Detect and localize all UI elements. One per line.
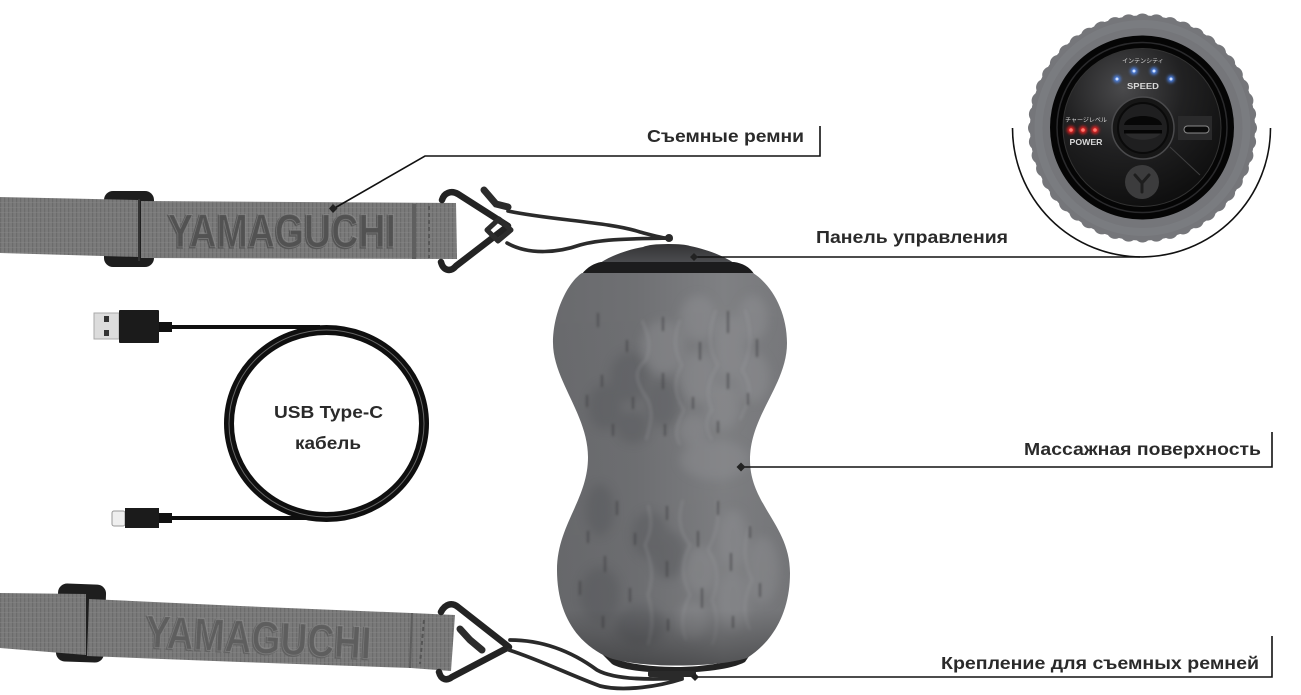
triangular ring lower [439, 604, 509, 679]
speed labels: SPEED [1127, 81, 1159, 91]
strap band upper right [141, 201, 457, 259]
pinch marks dark [580, 312, 760, 630]
callout: control panel label: Панель управления [816, 227, 1008, 247]
elastic cords lower [509, 640, 682, 688]
ball surface [553, 273, 790, 666]
massage ball [550, 244, 795, 677]
power labels [1065, 117, 1107, 147]
upper strap [0, 190, 673, 270]
black bezel [1050, 36, 1234, 220]
type-c plug body [125, 508, 159, 528]
bead edges [636, 362, 680, 635]
dark cells [580, 352, 686, 645]
strap band lower right [87, 599, 455, 671]
callout: removable straps label [329, 126, 820, 213]
cable coil [172, 327, 424, 518]
bottom hub [648, 671, 696, 677]
control face [1063, 48, 1221, 206]
mode switch [1112, 97, 1174, 159]
callout: massage surface label: Массажная поверхность [1024, 439, 1261, 459]
strap logo lower: YAMAGUCHI [143, 606, 372, 670]
power leds [1067, 126, 1099, 134]
buckle loop upper [104, 191, 154, 267]
top black band [582, 262, 754, 274]
power labels: POWER [1070, 137, 1102, 147]
speed leds [1114, 68, 1174, 82]
bottom cap [600, 652, 752, 673]
usb a plug body [119, 310, 159, 343]
grey scalloped rim [1030, 16, 1255, 240]
light cells [641, 295, 779, 640]
callout: control panel label [690, 227, 1140, 261]
speed labels: インテンシティ [1122, 58, 1164, 65]
cable label: USB Type-C [274, 402, 383, 422]
strap logo upper: YAMAGUCHI [167, 205, 395, 258]
strap band lower left [0, 593, 86, 655]
support arc [1012, 128, 1270, 257]
buckle loop lower [56, 583, 106, 663]
callout: massage surface label [736, 432, 1272, 472]
toggle lower [460, 629, 482, 650]
cord knot upper [484, 190, 508, 207]
callout: strap mount label: Крепление для съемных ремней [941, 653, 1259, 673]
triangular ring upper [441, 192, 508, 270]
bottom shade [568, 616, 782, 666]
strap band upper left [0, 197, 138, 257]
lower strap [0, 583, 682, 688]
elastic cords upper [507, 211, 671, 252]
control panel close-up [1012, 16, 1270, 257]
usb a plug metal [94, 313, 119, 339]
strap logo upper: YAMAGUCHI [168, 204, 396, 257]
y logo button [1125, 165, 1159, 199]
top dome [600, 244, 734, 263]
usb type-c cable [94, 310, 424, 528]
ball surface relief [568, 300, 782, 666]
diagonal seam [1170, 147, 1200, 175]
speed labels [1122, 58, 1164, 91]
callout: strap mount label [691, 636, 1272, 681]
strap logo lower: YAMAGUCHI [145, 605, 373, 669]
power labels: チャージレベル [1065, 117, 1107, 124]
usb-c port [1178, 116, 1212, 140]
usb type-c cable: кабель [295, 433, 361, 453]
callout: removable straps label: Съемные ремни [647, 126, 804, 146]
type-c plug metal [112, 511, 125, 526]
